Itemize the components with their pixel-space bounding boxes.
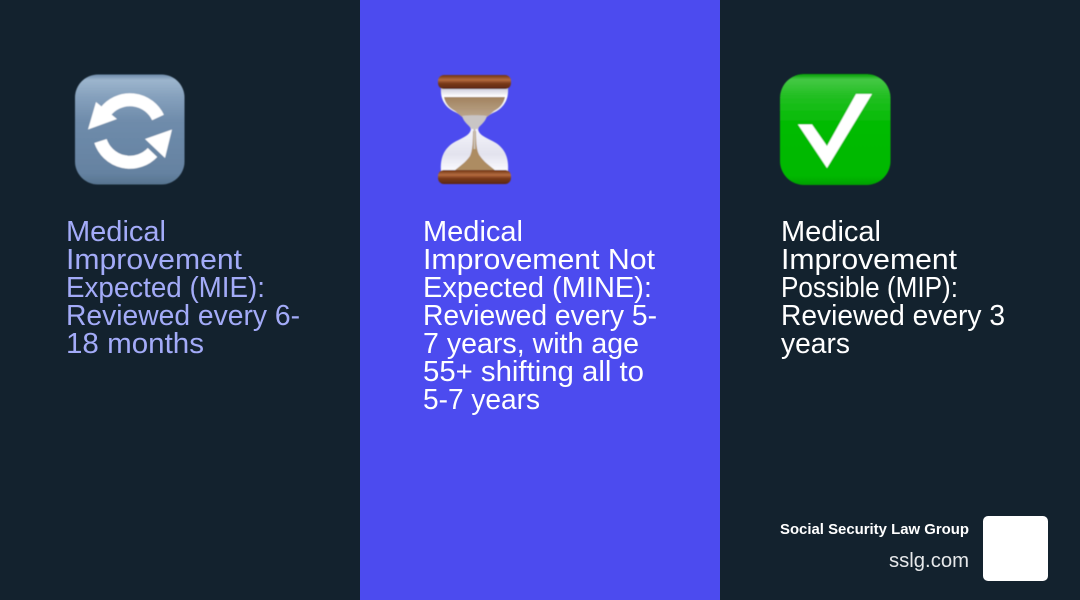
footer: logo placeholder <box>983 516 1048 581</box>
text: medical improvement not expected: Medical <box>423 216 523 248</box>
footer: organisation name: Social Security Law Group <box>780 521 969 538</box>
text: medical improvement not expected: Reviewed every 5- <box>423 300 657 332</box>
text: medical improvement not expected: 5-7 years <box>423 384 540 416</box>
text: medical improvement expected: Improvement <box>66 244 242 276</box>
text: medical improvement expected: Medical <box>66 216 166 248</box>
text: medical improvement possible: years <box>781 328 850 360</box>
text: medical improvement possible: Medical <box>781 216 881 248</box>
text: medical improvement possible: Possible (MIP): <box>781 272 958 304</box>
text: medical improvement expected: 18 months <box>66 328 204 360</box>
text: medical improvement not expected: 7 years, with age <box>423 328 639 360</box>
text: medical improvement possible <box>781 216 1005 360</box>
text: medical improvement not expected: Expected (MINE): <box>423 272 652 304</box>
footer: website: sslg.com <box>889 550 969 572</box>
text: medical improvement expected: Reviewed every 6- <box>66 300 300 332</box>
icon: hourglass <box>438 75 511 184</box>
text: medical improvement not expected: 55+ shifting all to <box>423 356 644 388</box>
icon: cycle arrows <box>75 74 184 184</box>
text: medical improvement possible: Reviewed every 3 <box>781 300 1005 332</box>
icon: check mark <box>780 74 890 185</box>
text: medical improvement not expected <box>423 216 657 416</box>
text: medical improvement not expected: Improvement Not <box>423 244 655 276</box>
text: medical improvement expected: Expected (MIE): <box>66 272 265 304</box>
text: medical improvement expected <box>66 216 300 360</box>
text: medical improvement possible: Improvement <box>781 244 957 276</box>
panel: medical improvement not expected <box>360 0 720 600</box>
